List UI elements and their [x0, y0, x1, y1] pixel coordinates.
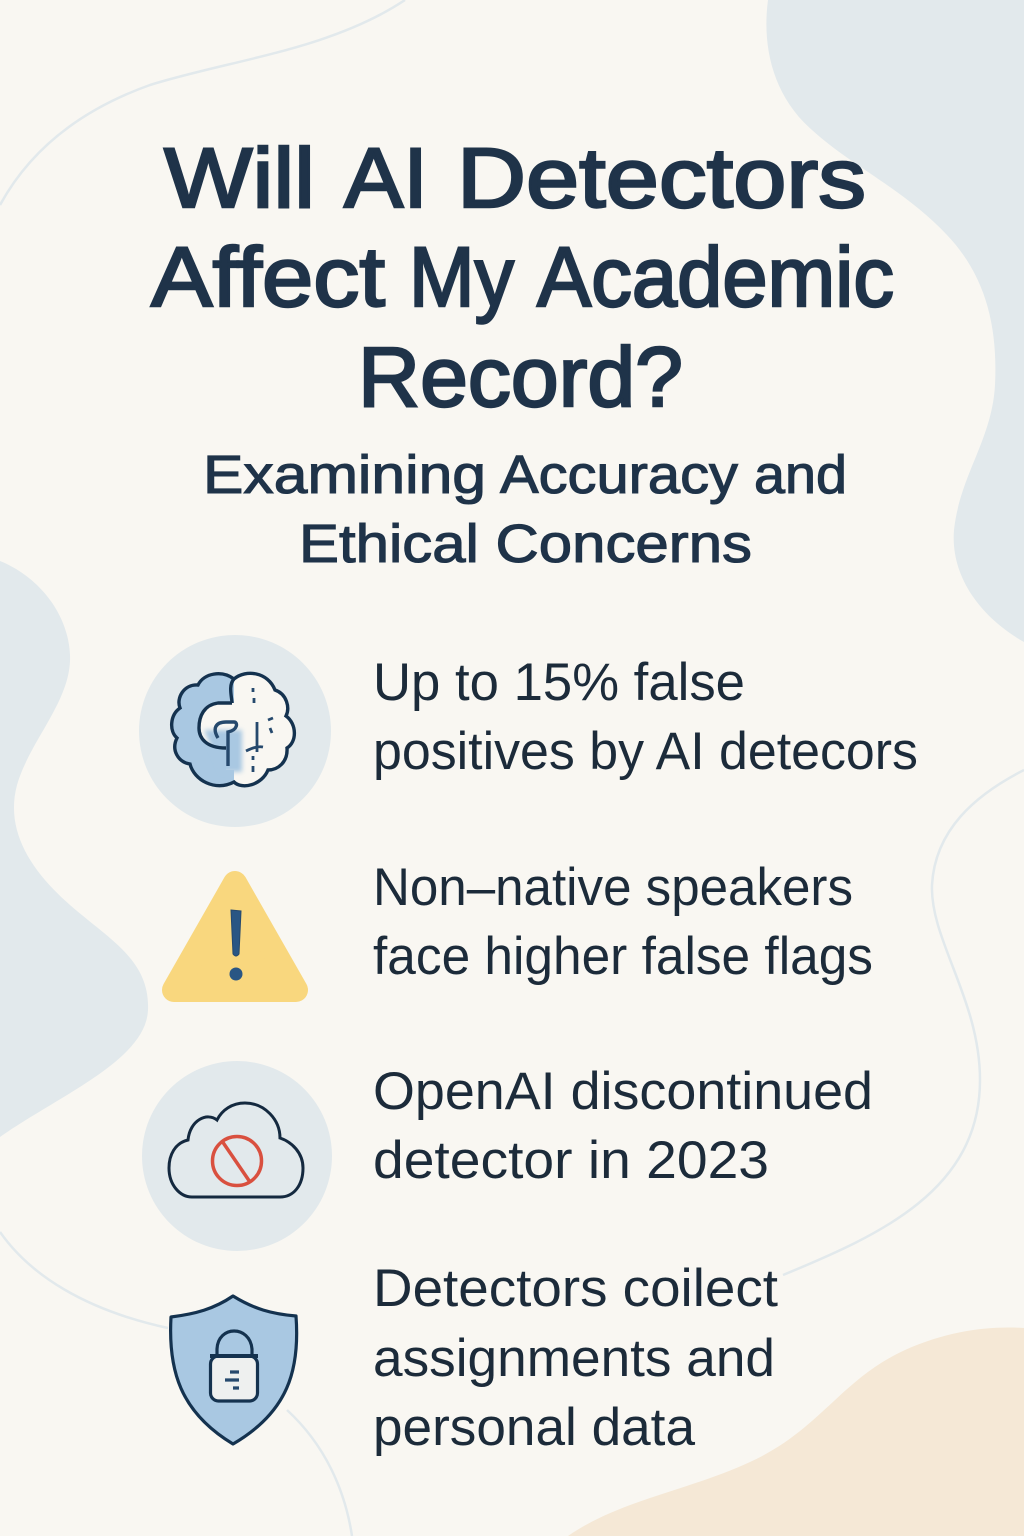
subtitle: and [754, 445, 847, 505]
text: data collection: assignments and [373, 1329, 775, 1388]
background line: bottom left curve [0, 1232, 352, 1536]
text: non-native speakers: Non–native speakers [373, 858, 853, 917]
text: data collection: personal data [373, 1398, 696, 1457]
title: My [409, 230, 514, 324]
title: Affect [151, 230, 385, 324]
icon: warning triangle [174, 883, 296, 990]
background blob: left [0, 561, 148, 1137]
item 2: non-native speakers [174, 858, 873, 990]
text: OpenAI discontinued: OpenAI discontinued [373, 1062, 873, 1121]
item 4: data collection [171, 1259, 778, 1457]
subtitle: Ethical Concerns [299, 514, 752, 574]
title [151, 131, 894, 424]
icon: shield with padlock [171, 1296, 297, 1444]
text: OpenAI discontinued: detector in 2023 [373, 1131, 769, 1190]
title: Record? [358, 330, 683, 424]
text: data collection: Detectors coilect [373, 1259, 778, 1318]
title: Detectors [457, 131, 866, 225]
background blob: bottom right [568, 1328, 1024, 1536]
icon: brain [139, 635, 331, 827]
item 3: OpenAI discontinued [142, 1061, 873, 1251]
title: Academic [537, 230, 894, 324]
subtitle: Examining [203, 445, 486, 505]
text: false positives: Up to 15% false [373, 653, 745, 712]
background line: top left curve [0, 0, 405, 205]
text: data collection [373, 1259, 778, 1457]
item 1: false positives [139, 635, 918, 827]
title: AI [344, 131, 428, 225]
text: false positives [373, 653, 918, 781]
text: non-native speakers: face higher false flags [373, 927, 873, 986]
background blob: top right [766, 0, 1024, 642]
text: OpenAI discontinued [373, 1062, 873, 1190]
text: false positives: positives by AI detecors [373, 722, 918, 781]
text: non-native speakers [373, 858, 873, 986]
subtitle: Accuracy [500, 445, 738, 505]
title: Will [164, 131, 315, 225]
background line: right curve [783, 770, 1024, 1275]
subtitle [203, 445, 847, 574]
icon: cloud with prohibition sign [142, 1061, 332, 1251]
